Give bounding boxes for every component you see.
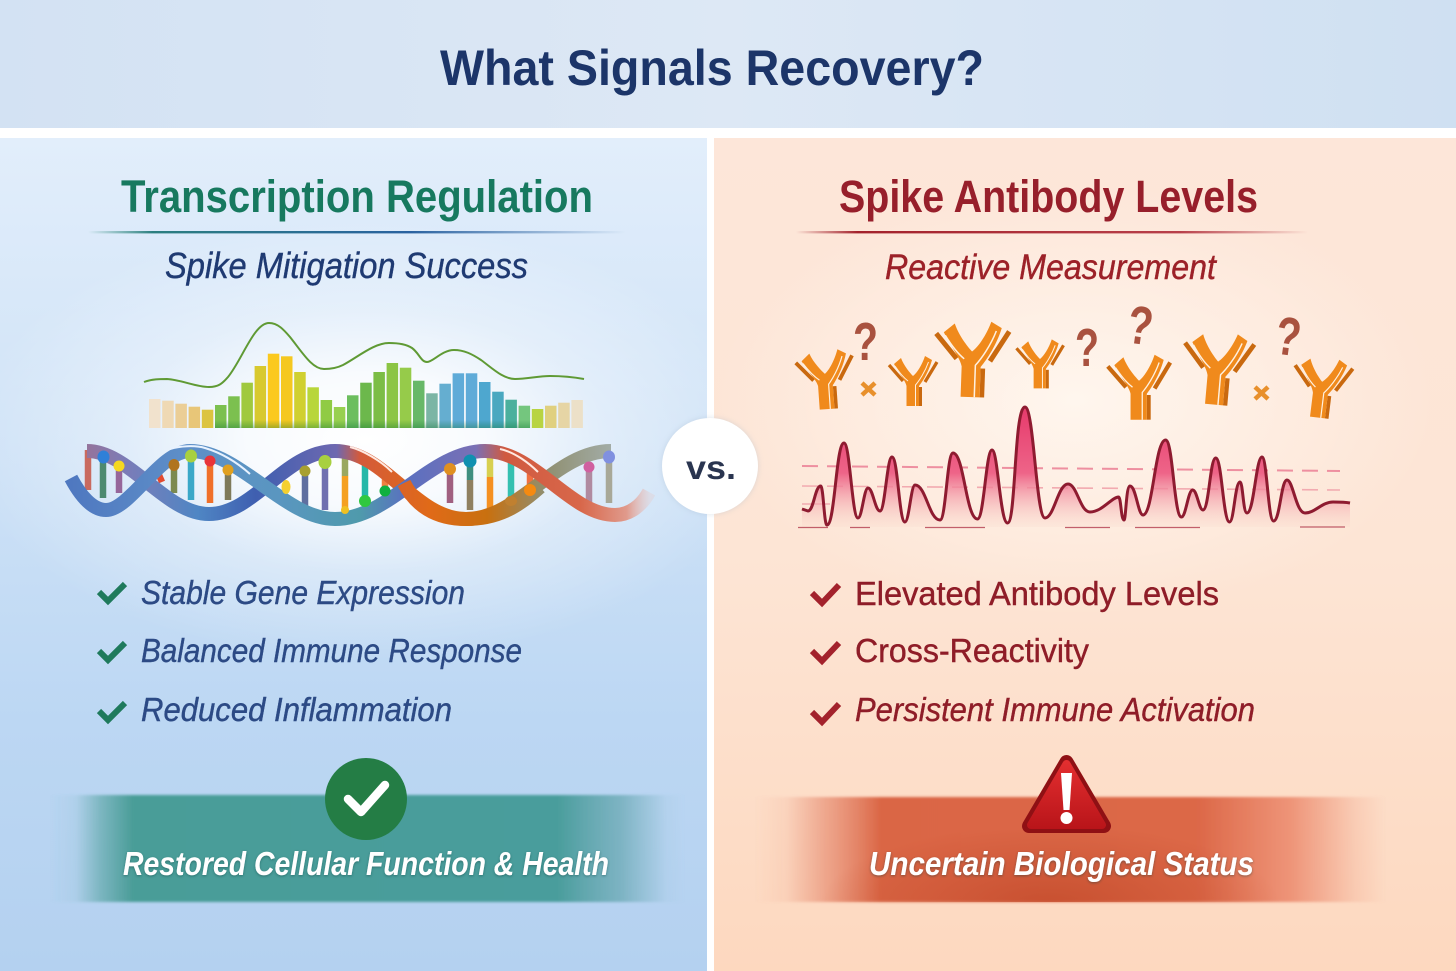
title: What Signals Recovery? xyxy=(440,40,984,96)
icons: question marks: ? xyxy=(1075,318,1099,378)
subheading: spike mitigation success: Spike Mitigation Success xyxy=(165,245,528,286)
icon: success check xyxy=(325,758,407,840)
highlights xyxy=(170,446,250,474)
banner: uncertain status xyxy=(755,762,1385,902)
back strand xyxy=(87,451,611,519)
icons: question marks: ? xyxy=(1124,295,1157,357)
list: right effects xyxy=(812,575,1255,728)
chart: gene expression bars xyxy=(149,354,583,428)
panel: transcription regulation xyxy=(0,138,707,971)
rungs xyxy=(88,450,609,513)
banner text: Uncertain Biological Status xyxy=(869,845,1254,882)
subheading: reactive measurement: Reactive Measurement xyxy=(885,248,1217,287)
chart: reference dashed lines xyxy=(802,466,1340,504)
front strand xyxy=(71,451,649,519)
item: reduced inflammation: Reduced Inflammation xyxy=(141,691,452,728)
chart: antibody signal line xyxy=(802,407,1350,525)
heading: spike antibody levels: Spike Antibody Levels xyxy=(839,171,1258,222)
illustration: dna double helix xyxy=(71,446,649,519)
item: persistent immune activation: Persistent Immune Activation xyxy=(855,691,1255,728)
item: cross-reactivity: Cross-Reactivity xyxy=(855,632,1089,669)
icons: small crosses xyxy=(862,383,1268,399)
icons: question marks: ? xyxy=(1272,306,1305,368)
vs badge xyxy=(662,418,758,514)
banner text: Restored Cellular Function & Health xyxy=(123,845,609,882)
heading: transcription regulation: Transcription Regulation xyxy=(121,171,593,222)
banner: restored function xyxy=(50,758,685,902)
illustration: antibodies xyxy=(795,320,1354,421)
item: balanced immune response: Balanced Immune Response xyxy=(141,632,522,669)
icons: question marks xyxy=(853,295,1305,378)
chart: expression curve xyxy=(144,323,584,387)
vs badge: vs. xyxy=(686,449,736,486)
chart: antibody signal area xyxy=(802,407,1350,527)
strand front overlay xyxy=(404,483,540,519)
header band xyxy=(0,0,1456,128)
icon: warning triangle xyxy=(1029,762,1104,826)
rung beads xyxy=(98,450,615,514)
list: left benefits xyxy=(99,574,522,728)
panel: spike antibody levels xyxy=(714,138,1456,971)
icons: question marks: ? xyxy=(853,312,878,372)
item: stable gene expression: Stable Gene Expression xyxy=(141,574,465,611)
item: elevated antibody levels: Elevated Antibody Levels xyxy=(855,575,1219,612)
